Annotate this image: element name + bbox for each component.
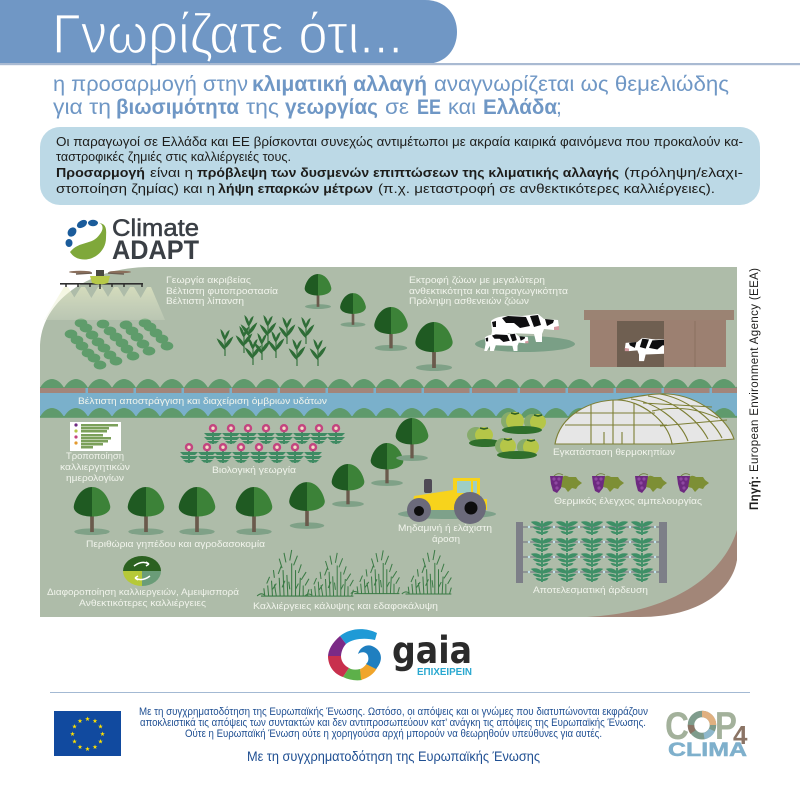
icon: tomato beds	[467, 412, 546, 459]
text: precision farming: Βέλτιστη λίπανση	[166, 295, 244, 306]
text: calendars: ημερολογίων	[66, 472, 124, 483]
text: calendars: καλλιεργητικών	[60, 461, 130, 472]
text: organic farming: Βιολογική γεωργία	[212, 464, 297, 475]
subtitle: αναγνωρίζεται ως θεμελιώδης	[434, 73, 729, 96]
panel: definition text box: ταστροφικές ζημιές στις καλλιέργειές τους.	[56, 150, 291, 164]
subtitle: για τη	[53, 96, 111, 119]
source note: Πηγή: European Environment Agency (EEA)	[749, 268, 761, 510]
text: greenhouse label: Εγκατάσταση θερμοκηπίων	[553, 446, 675, 457]
panel: definition text box: στοποίηση ζημίας) και η	[56, 182, 215, 196]
subtitle: ΕΕ	[417, 96, 441, 119]
drainage channel: Βέλτιστη αποστράγγιση και διαχείριση όμβριων υδάτων	[78, 395, 327, 406]
text: precision farming	[166, 274, 279, 306]
trees: upper row	[305, 274, 453, 371]
text: tillage: άροση	[432, 533, 460, 544]
text: crop diversification	[47, 586, 240, 608]
icon: corn field	[217, 315, 326, 366]
icon: crop rows	[65, 318, 173, 370]
text: crop diversification: Διαφοροποίηση καλλιεργειών, Αμειψισπορά	[47, 586, 240, 597]
panel: definition text box: (πρόληψη/ελαχι-	[624, 166, 743, 180]
text: calendars	[60, 450, 130, 483]
text: irrigation: Αποτελεσματική άρδευση	[533, 584, 648, 595]
header: blue title pill	[0, 0, 800, 65]
text: precision farming: Βέλτιστη φυτοπροστασία	[166, 285, 279, 296]
panel: definition text box: λήψη επαρκών μέτρων	[218, 182, 373, 196]
trees: lower rows	[74, 418, 428, 535]
text: livestock	[409, 274, 569, 306]
icon: tractor	[398, 478, 496, 524]
panel: definition text box	[40, 127, 760, 205]
logo: gaia: gaia	[392, 629, 472, 672]
icon: irrigation	[516, 521, 667, 583]
subtitle: ;	[556, 96, 562, 119]
icon: cows on pasture	[475, 314, 575, 352]
text: EU funding disclaimer: Με τη συγχρηματοδότηση της Ευρωπαϊκής Ένωσης	[247, 749, 540, 764]
icon: barn with cow	[584, 310, 734, 367]
text: crop diversification: Ανθεκτικότερες καλλιέργειες	[79, 597, 207, 608]
logo: COP4 CLIMA: COP	[665, 705, 737, 748]
text: viticulture: Θερμικός έλεγχος αμπελουργίας	[554, 495, 703, 506]
text: livestock: Εκτροφή ζώων με μεγαλύτερη	[409, 274, 545, 285]
icon: cover crops	[257, 550, 451, 596]
text: tillage: Μηδαμινή ή ελάχιστη	[398, 522, 492, 533]
panel: definition text box: Προσαρμογή	[56, 166, 145, 180]
subtitle: Ελλάδα	[483, 96, 557, 119]
icon: EU flag	[54, 711, 121, 756]
text: EU funding disclaimer: Με τη συγχρηματοδότηση της Ευρωπαϊκής Ένωσης. Ωστόσο, οι απόψεις και οι γνώμες που διατυπώνονται εκφράζουν	[139, 706, 648, 718]
panel: definition text box: πρόβλεψη των δυσμενών επιπτώσεων της κλιματικής αλλαγής	[197, 166, 619, 180]
icon: greenhouse	[555, 394, 734, 444]
subtitle	[53, 73, 729, 119]
text: calendars: Τροποποίηση	[66, 450, 124, 461]
subtitle: γεωργίας	[285, 96, 378, 119]
icon: crop rotation	[123, 556, 161, 586]
logo: Climate ADAPT: Climate	[112, 215, 199, 242]
text: margins and agroforestry: Περιθώρια γηπέδου και αγροδασοκομία	[86, 538, 266, 549]
icon: calendar	[70, 422, 121, 451]
logo: COP4 CLIMA: 4	[733, 720, 748, 750]
logo: Climate ADAPT	[66, 215, 199, 265]
logo: gaia: ΕΠΙΧΕΙΡΕΙΝ	[417, 667, 472, 678]
text: cover crops: Καλλιέργειες κάλυψης και εδαφοκάλυψη	[253, 600, 438, 611]
icon: spraying drone	[44, 270, 165, 320]
text: EU funding disclaimer: αποκλειστικά τις απόψεις των συντακτών και δεν αντιπροσωπεύουν κατ’ ανάγκη τις απόψεις της Ευρωπαϊκής Ένωσης.	[140, 717, 646, 729]
text: livestock: ανθεκτικότητα και παραγωγικότητα	[409, 285, 569, 296]
text: livestock: Πρόληψη ασθενειών ζώων	[409, 295, 529, 306]
subtitle: και	[448, 96, 476, 119]
panel: definition text box: (π.χ. μεταστροφή σε ανθεκτικότερες καλλιέργειες).	[378, 182, 715, 196]
subtitle: βιωσιμότητα	[116, 96, 239, 119]
logo: COP4 CLIMA: CLIMA	[668, 740, 747, 761]
subtitle: της	[246, 96, 279, 119]
icon: organic flowers	[180, 424, 345, 463]
title: Γνωρίζατε ότι...	[52, 2, 403, 65]
subtitle: σε	[385, 96, 409, 119]
subtitle: η προσαρμογή στην	[53, 73, 248, 96]
icon: grapes	[550, 474, 709, 493]
logo: Climate ADAPT: ADAPT	[112, 235, 199, 265]
text: tillage	[398, 522, 492, 544]
logo: gaia	[328, 629, 472, 680]
text: EU funding disclaimer: Ούτε η Ευρωπαϊκή Ένωση ούτε η χορηγούσα αρχή μπορούν να θεωρηθούν υπεύθυνες για αυτές.	[185, 728, 602, 740]
text: EU funding disclaimer	[139, 706, 648, 764]
subtitle: κλιματική αλλαγή	[252, 73, 427, 96]
text: precision farming: Γεωργία ακριβείας	[166, 274, 252, 285]
panel: definition text box: Οι παραγωγοί σε Ελλάδα και ΕΕ βρίσκονται συνεχώς αντιμέτωποι με ακραία καιρικά φαινόμενα που προκαλούν κα-	[56, 135, 743, 149]
panel: farm landscape	[40, 267, 737, 617]
drainage channel	[40, 378, 737, 418]
panel: definition text box: είναι η	[150, 166, 193, 180]
